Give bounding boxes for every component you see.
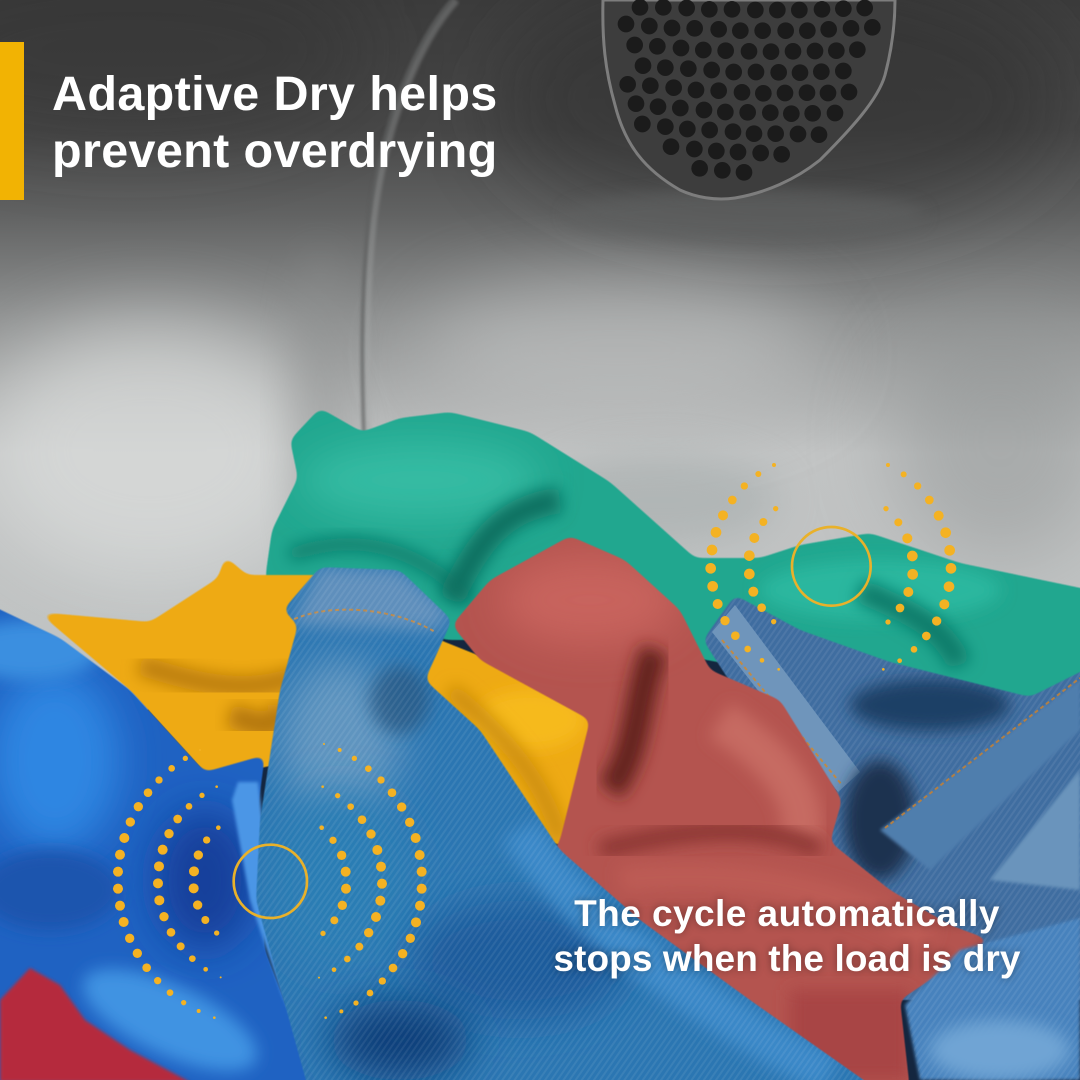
caption: stops when the load is dry bbox=[553, 938, 1021, 979]
caption: The cycle automatically bbox=[574, 893, 1000, 934]
teal shirt bbox=[250, 400, 1080, 710]
denim bottom right bbox=[905, 918, 1080, 1080]
accent bar bbox=[0, 42, 24, 200]
dotted wave rings: lower left bbox=[113, 743, 427, 1019]
title bbox=[52, 67, 498, 178]
light blue placket bbox=[232, 782, 372, 1080]
vent grille bbox=[603, 0, 895, 199]
caption bbox=[552, 893, 1022, 982]
title: prevent overdrying bbox=[52, 124, 498, 178]
red cloth bottom left bbox=[0, 968, 190, 1080]
denim sleeve center bbox=[250, 560, 890, 1080]
vent bowl shading bbox=[565, 190, 925, 240]
drum seam bbox=[366, 0, 456, 440]
brick red sweatshirt bbox=[440, 530, 1000, 1080]
yellow shirt bbox=[30, 550, 600, 850]
shadow under laundry bbox=[0, 590, 1080, 1080]
title: Adaptive Dry helps bbox=[52, 67, 498, 121]
dotted wave rings: upper right bbox=[705, 463, 956, 671]
jeans right bbox=[700, 590, 1080, 1010]
bright blue hoodie bbox=[0, 609, 306, 1080]
